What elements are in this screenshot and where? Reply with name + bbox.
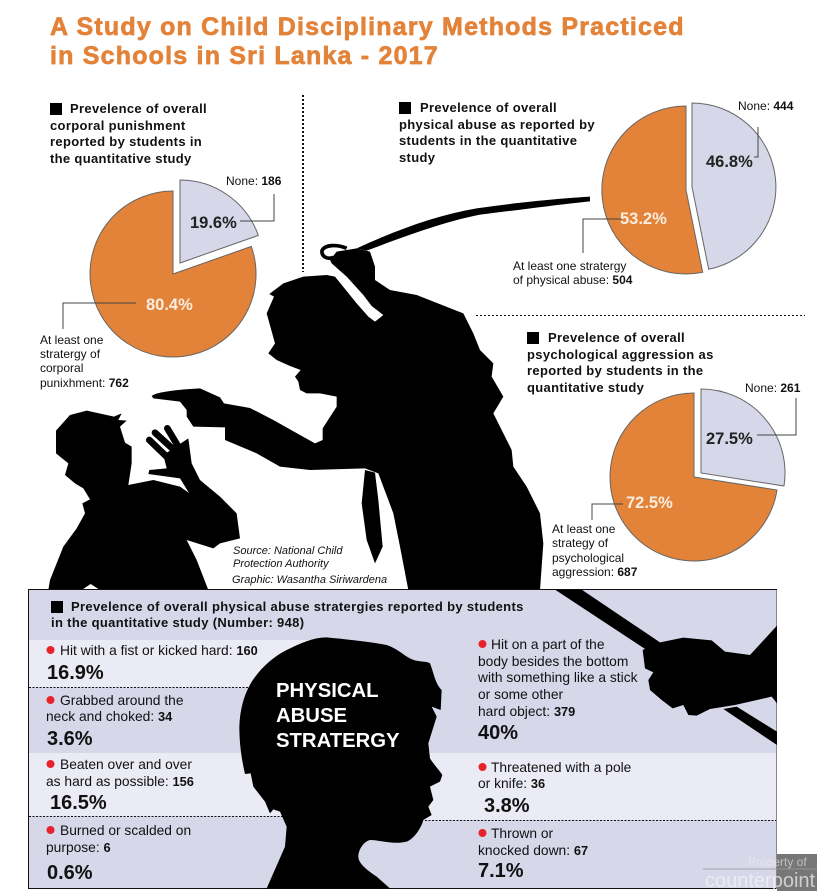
pie chart: corporal punishment: None: 186: [226, 174, 282, 188]
item: threatened: Threatened with a pole: [491, 760, 632, 775]
pie chart: physical abuse: 53.2%: [620, 210, 667, 228]
source credit: Graphic: Wasantha Siriwardena: [232, 574, 387, 586]
icon: child head silhouette: [239, 637, 442, 888]
pie chart: corporal punishment: [40, 174, 282, 390]
item: hit with a fist: Hit with a fist or kicked hard: 160: [60, 643, 258, 658]
item: thrown: knocked down: 67: [478, 843, 588, 858]
heading: corporal punishment: reported by students in: [50, 134, 202, 149]
heading: physical abuse: Prevelence of overall: [420, 100, 557, 115]
heading: physical abuse: study: [399, 150, 436, 165]
illustration: adult silhouette with cane: [152, 197, 590, 590]
heading: strategies: [51, 599, 524, 630]
icon: stick and hand: [555, 590, 777, 745]
pie chart: psychological aggression: 72.5%: [626, 494, 673, 512]
illustration: child silhouette: [48, 411, 240, 590]
pie chart: corporal punishment: At least one: [40, 333, 104, 347]
pie chart: corporal punishment: 80.4%: [146, 296, 193, 314]
item: thrown: [478, 826, 588, 882]
pie chart: psychological aggression: aggression: 687: [552, 565, 638, 579]
item: grabbed and choked: 3.6%: [47, 728, 93, 750]
watermark: Property of: [748, 855, 807, 869]
text: PHYSICAL ABUSE STRATERGY: ABUSE: [276, 705, 347, 727]
heading: strategies: Prevelence of overall physical abuse stratergies reported by students: [71, 599, 524, 614]
heading: physical abuse: [399, 100, 595, 165]
item: burned: [46, 823, 191, 884]
pie chart: psychological aggression: psychological: [552, 551, 624, 565]
watermark: [703, 854, 817, 891]
pie chart: psychological aggression: At least one: [552, 522, 616, 536]
heading: psychological aggression: psychological aggression as: [527, 347, 714, 362]
pie chart: corporal punishment: 19.6%: [190, 214, 237, 232]
item: threatened: [478, 760, 632, 817]
heading: corporal punishment: [50, 101, 207, 166]
item: burned: Burned or scalded on: [60, 823, 191, 838]
item: hit with an object: or some other: [478, 687, 564, 702]
item: hit with an object: body besides the bottom: [478, 654, 628, 669]
source credit: Source: National Child: [233, 545, 343, 557]
heading: strategies: in the quantitative study (Number: 948): [51, 615, 304, 630]
pie chart: psychological aggression: None: 261: [745, 381, 801, 395]
panel: physical abuse strategies: [28, 590, 777, 889]
heading: corporal punishment: corporal punishment: [50, 118, 186, 133]
item: grabbed and choked: Grabbed around the: [60, 693, 184, 708]
title: in Schools in Sri Lanka - 2017: [50, 42, 439, 70]
heading: psychological aggression: reported by students in the: [527, 363, 703, 378]
heading: corporal punishment: the quantitative study: [50, 151, 192, 166]
pie chart: physical abuse: At least one stratergy: [513, 259, 626, 273]
heading: physical abuse: students in the quantitative: [399, 133, 577, 148]
pie chart: psychological aggression: strategy of: [552, 536, 609, 550]
heading: physical abuse: physical abuse as reported by: [399, 117, 595, 132]
pie chart: psychological aggression: 27.5%: [706, 430, 753, 448]
heading: psychological aggression: Prevelence of overall: [548, 330, 685, 345]
item: hit with a fist: 16.9%: [47, 662, 104, 684]
pie chart: corporal punishment: stratergy of: [40, 347, 101, 361]
divider lines: [303, 95, 805, 316]
item: beaten: as hard as possible: 156: [46, 774, 194, 789]
item: burned: 0.6%: [47, 862, 93, 884]
pie chart: physical abuse: 46.8%: [706, 153, 753, 171]
heading: psychological aggression: quantitative study: [527, 380, 645, 395]
item: hit with an object: with something like a stick: [477, 670, 638, 685]
item: thrown: Thrown or: [491, 826, 554, 841]
pie chart: physical abuse: of physical abuse: 504: [513, 273, 633, 287]
title: A Study on Child Disciplinary Methods Practiced: [50, 13, 685, 41]
item: hit with an object: Hit on a part of the: [491, 637, 605, 652]
item: hit with an object: 40%: [478, 722, 518, 744]
item: beaten: 16.5%: [50, 792, 107, 814]
item: beaten: [46, 757, 194, 814]
item: burned: purpose: 6: [46, 840, 111, 855]
source credit: Protection Authority: [233, 558, 330, 570]
item: grabbed and choked: [46, 693, 184, 750]
pie chart: psychological aggression: [552, 381, 801, 579]
item: thrown: 7.1%: [478, 860, 524, 882]
item: threatened: or knife: 36: [478, 776, 545, 791]
text: PHYSICAL ABUSE STRATERGY: PHYSICAL: [276, 680, 379, 702]
text: PHYSICAL ABUSE STRATERGY: [276, 680, 400, 752]
item: hit with an object: [477, 637, 638, 744]
item: threatened: 3.8%: [484, 795, 530, 817]
pie chart: corporal punishment: punixhment: 762: [40, 376, 129, 390]
heading: corporal punishment: Prevelence of overall: [70, 101, 207, 116]
pie chart: physical abuse: [513, 99, 794, 287]
text: PHYSICAL ABUSE STRATERGY: STRATERGY: [276, 730, 400, 752]
pie chart: physical abuse: None: 444: [738, 99, 794, 113]
item: grabbed and choked: neck and choked: 34: [46, 709, 173, 724]
heading: psychological aggression: [527, 330, 714, 395]
item: hit with a fist: [46, 643, 258, 684]
item: hit with an object: hard object: 379: [478, 704, 575, 719]
pie chart: corporal punishment: corporal: [40, 361, 83, 375]
title: [50, 13, 685, 70]
item: beaten: Beaten over and over: [60, 757, 192, 772]
source credit: [232, 545, 387, 586]
